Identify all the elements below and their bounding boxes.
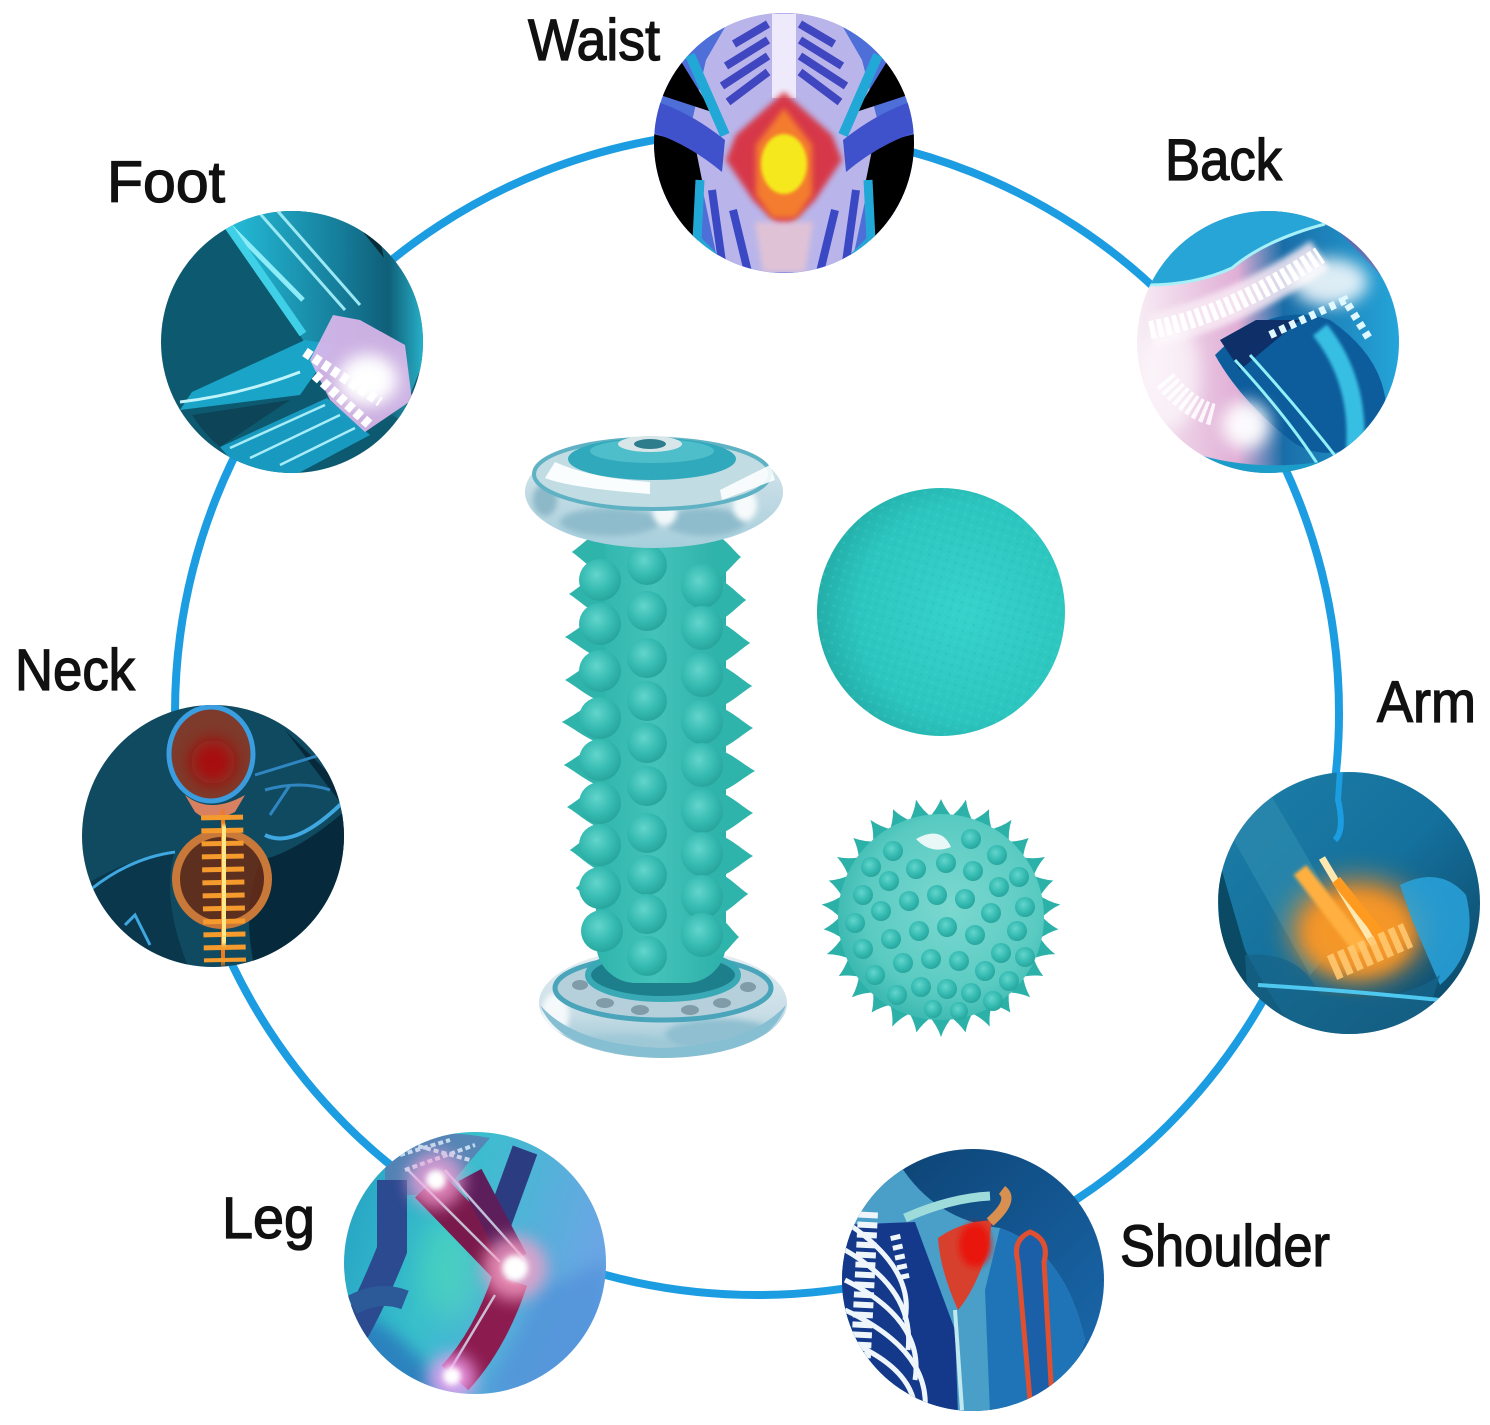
surface studs [845,829,1035,1020]
heading: Arm: Arm [1377,670,1476,735]
panel: back [1135,128,1405,480]
panel: arm [1215,670,1485,1040]
image: glowing elbow joint [1215,770,1485,1040]
panel: leg [222,1130,608,1402]
roller bottom wheel [539,948,787,1058]
image: glowing back skeleton [1135,200,1405,480]
left edge spikes [562,530,605,953]
roller spiked body [562,525,755,983]
blue connecting ring [175,131,1339,1295]
heading: Back: Back [1165,128,1283,193]
panel: shoulder [840,1148,1330,1420]
image: glowing neck spine [80,703,346,971]
foot roller with clear wheels [525,436,787,1058]
image: glowing ankle and foot [158,208,430,476]
roller top wheel [525,436,783,548]
right edge spikes [715,535,755,959]
heading: Shoulder: Shoulder [1120,1214,1330,1279]
image: lower spine pain [650,10,920,280]
panel: foot [107,150,430,476]
heading: Foot: Foot [107,150,225,215]
outer spikes [820,797,1062,1037]
panel: neck [15,638,346,971]
heading: Neck: Neck [15,638,136,703]
roller inner studs [579,545,723,976]
heading: Waist: Waist [528,8,660,73]
smooth massage ball [817,488,1065,736]
spiky massage ball [820,797,1062,1037]
heading: Leg: Leg [222,1186,315,1251]
image: glowing leg joints [342,1130,608,1402]
panel: waist [528,8,920,280]
image: shoulder joint and rib cage [840,1148,1106,1420]
